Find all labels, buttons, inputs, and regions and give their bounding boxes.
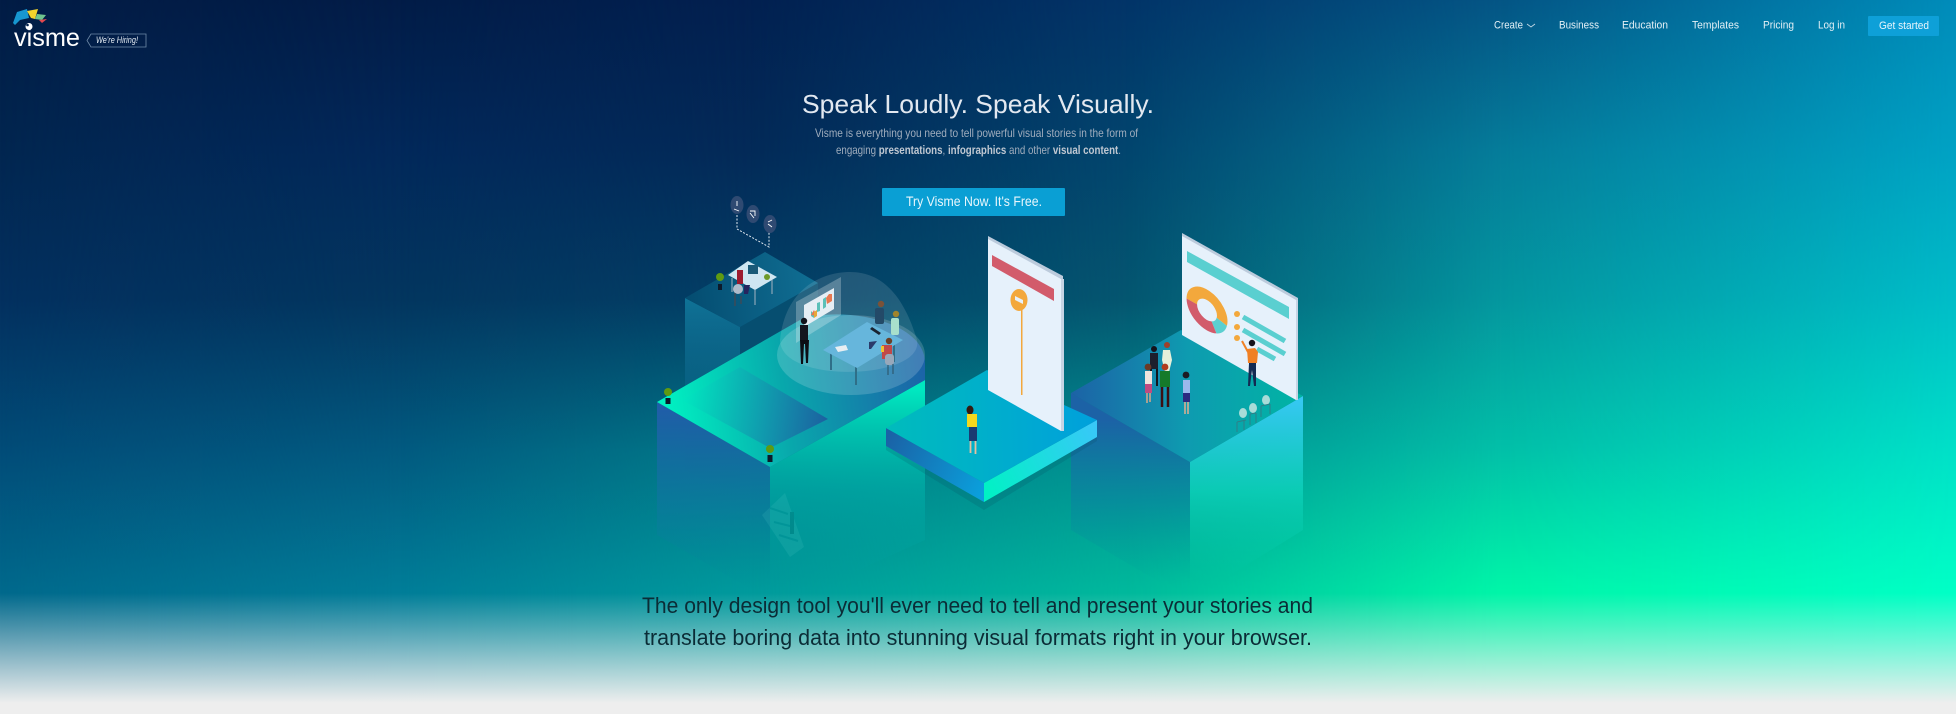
tall white board: [988, 236, 1064, 431]
isometric right block: [1071, 233, 1303, 600]
bottom tagline: The only design tool you'll ever need to tell and present your stories and: [642, 593, 1313, 618]
icon: plant at left corner: [664, 388, 672, 404]
navigation menu: Templates: [1692, 20, 1739, 32]
navigation menu: Log in: [1818, 20, 1845, 32]
we're hiring tag: We're Hiring!: [96, 35, 138, 45]
get started button: [1868, 16, 1939, 36]
desk with woman at computer: [728, 261, 777, 306]
headline: Speak Loudly. Speak Visually.: [802, 89, 1154, 119]
isometric back block with desk: [685, 252, 818, 500]
bottom white fade: [0, 593, 1956, 714]
presentation screen with chart: [796, 277, 841, 343]
navigation menu: Create: [1494, 20, 1523, 32]
audience group: [1145, 342, 1190, 414]
presenter in orange: [1242, 340, 1258, 386]
subheading text: engaging presentations, infographics and other visual content.: [836, 143, 1121, 157]
presentation board with donut chart: [1182, 233, 1298, 400]
meeting table and people: [823, 301, 903, 385]
visme logo: [13, 9, 80, 52]
icon: plant at front corner: [766, 445, 774, 462]
subheading text: Visme is everything you need to tell powerful visual stories in the form of: [815, 126, 1139, 140]
woman in yellow: [966, 406, 977, 454]
isometric main block with dome room: [657, 272, 925, 610]
bottom tagline: translate boring data into stunning visual formats right in your browser.: [644, 625, 1312, 650]
navigation menu: Pricing: [1763, 20, 1794, 32]
isometric middle platform with tall board: [886, 236, 1097, 510]
visme logo: visme: [14, 24, 80, 52]
floating icons with dashed connector: [730, 196, 776, 247]
navigation menu: [1494, 20, 1845, 32]
presenter in black suit: [800, 318, 809, 364]
chairs: [1237, 395, 1270, 432]
donut chart: [1192, 286, 1222, 334]
glass dome: [777, 272, 925, 395]
faint stairs with silhouette: [762, 493, 804, 557]
bottom tagline: [642, 593, 1313, 650]
navigation menu: Business: [1559, 20, 1599, 32]
icon: potted plant on back block: [716, 273, 724, 290]
get started button: Get started: [1879, 20, 1929, 32]
we're hiring tag: [87, 34, 146, 47]
try visme button: [882, 188, 1065, 216]
try visme button: Try Visme Now. It's Free.: [906, 193, 1042, 209]
navigation menu: Education: [1622, 20, 1668, 32]
subheading text: [815, 126, 1139, 157]
